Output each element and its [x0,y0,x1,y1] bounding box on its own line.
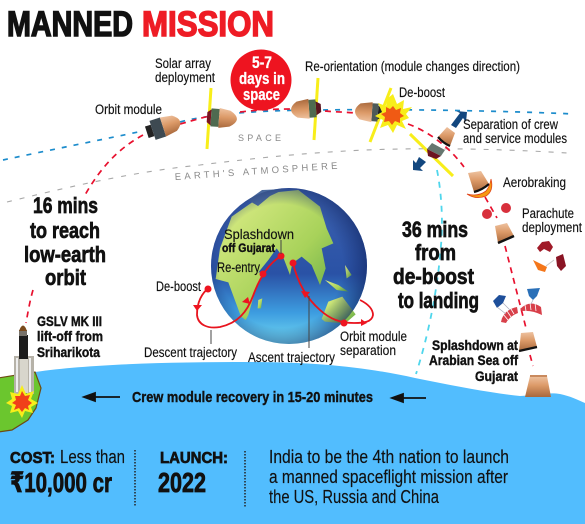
callout: 5-7 days in space: days in [239,69,285,88]
globe label: de-boost: De-boost [156,279,201,294]
label: orbit module separation: separation [340,343,396,358]
atmosphere boundary line [7,149,567,202]
note: india 4th nation: a manned spaceflight mission after [269,466,508,487]
divider [135,450,245,507]
label: splashdown at arabian sea: Gujarat [475,368,518,384]
label: solar array deployment: Solar array [155,56,211,71]
callout: 5-7 days in space [230,50,292,110]
icon: arrow up [451,111,467,128]
label: separation [463,117,567,146]
globe [211,188,367,344]
cost: Less than [60,446,125,467]
label: solar array deployment [155,56,215,85]
title: MANNED [7,5,133,44]
service module fall path, cyan dashed [416,170,442,374]
label: orbit module separation: Orbit module [340,329,407,344]
crew module recovery: Crew module recovery in 15-20 minutes [132,389,373,406]
globe label: splashdown [222,226,294,255]
label: parachute deployment: Parachute [522,206,574,221]
icon: crew module separating [438,127,455,146]
icon: orbit module [144,112,183,142]
ascent trajectory [293,263,373,323]
label: orbit module: Orbit module [95,102,162,117]
launch: LAUNCH: [160,450,228,467]
label: aerobraking: Aerobraking [503,175,566,190]
icon: arrow down [413,157,426,171]
label: solar array deployment: deployment [155,70,215,85]
label: space: SPACE [238,133,281,143]
globe polar ice [248,189,285,206]
label: gslv lift-off: Sriharikota [37,344,100,360]
label: ascent trajectory: Ascent trajectory [248,350,335,365]
label: orbit module separation [340,329,407,358]
label: earth's atmosphere: EARTH'S ATMOSPHERE [174,161,338,183]
descent trajectory [197,256,281,328]
solar array 4 [410,134,453,176]
launch: 2022 [158,467,206,498]
sea [0,362,585,524]
icon: drogue parachutes [482,203,511,219]
icon: module with solar array [206,107,238,129]
label: parachute deployment [522,206,582,235]
label: splashdown at arabian sea [429,337,518,384]
callout: 36 mins: de-boost [393,264,475,289]
icon: descending capsule [519,332,537,351]
callout: 16 mins: 16 mins [33,193,98,218]
globe landmasses [216,190,356,324]
label: descent trajectory: Descent trajectory [144,345,237,360]
note: india 4th nation: the US, Russia and China [269,486,440,507]
arrow: left [84,393,120,401]
cost: ₹10,000 cr [10,467,112,498]
title: MISSION [142,5,274,44]
descent path, red dashed [408,124,533,366]
globe label: splashdown: Splashdown [224,226,294,242]
trajectory markers [193,252,367,326]
callout: 5-7 days in space: 5-7 [252,53,272,72]
ascent path, red dashed [26,109,356,323]
orbit path, blue dashed [3,110,575,160]
arrow: right segment [392,394,426,402]
icon: aerobraking capsule [467,171,492,198]
solar array 1 [207,88,211,149]
icon: right parachute [520,288,542,315]
label: gslv lift-off [37,313,103,360]
label: re-orientation: Re-orientation (module changes direction) [305,59,520,74]
note: india 4th nation [269,446,509,507]
cost [10,446,125,498]
label: de-boost: De-boost [399,85,445,100]
icon: capsule under drogue [495,223,514,243]
icon: parachute deployment pieces [533,241,566,272]
callout: 16 mins: low-earth [24,242,106,267]
land: launch site [0,372,41,432]
pointer lines [211,240,309,348]
cost: COST: [10,450,55,467]
title [7,5,274,44]
callout: 5-7 days in space: space [243,85,280,104]
label: separation: Separation of crew [463,117,558,132]
callout: 36 mins [393,217,479,313]
callout: 36 mins: to landing [398,288,479,313]
solar array 3 [370,88,391,142]
callout: 36 mins: 36 mins [402,217,468,242]
icon: re-orientation module [290,98,322,120]
callout: 36 mins: from [415,240,456,265]
icon: splashed capsule [525,375,551,397]
icon: service module separating [427,143,445,159]
globe label: splashdown: off Gujarat [222,241,275,255]
label: gslv lift-off: lift-off from [37,328,103,344]
callout: 16 mins: to reach [30,218,100,243]
icon: de-boost module [354,101,383,123]
icon: de-boost explosion [375,94,412,133]
launch [158,450,228,498]
solar array 2 [314,78,318,140]
icon: left parachute [493,295,518,323]
label: gslv lift-off: GSLV MK III [37,313,102,329]
label: splashdown at arabian sea: Splashdown at [432,337,518,353]
label: splashdown at arabian sea: Arabian Sea off [429,352,518,368]
callout: 16 mins: orbit [45,265,87,290]
globe label: re-entry: Re-entry [217,260,260,275]
note: india 4th nation: India to be the 4th nation to launch [269,446,509,467]
label: separation: and service modules [463,131,567,146]
callout: 16 mins [24,193,106,290]
icon: rocket [6,326,38,418]
